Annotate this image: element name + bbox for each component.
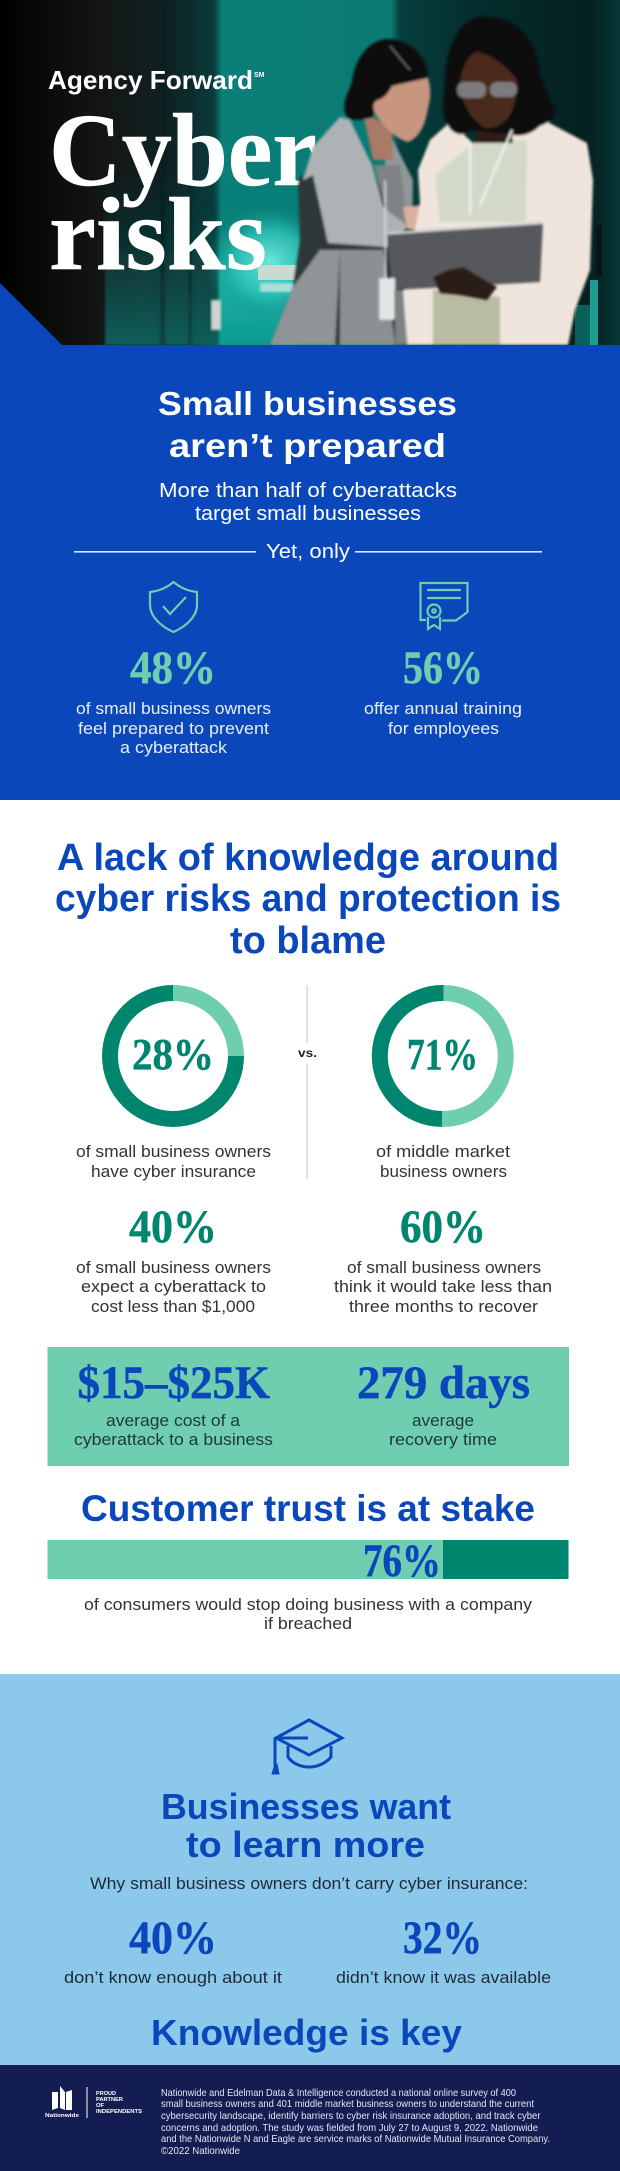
heading [158,385,457,464]
bar chart: 76% [48,1535,568,1587]
blue corner triangle [0,283,62,345]
panel: footer [0,2065,620,2171]
bar chart: 76%: 76% [363,1535,441,1587]
heading [55,837,561,962]
footnote: ©2022 Nationwide [161,2145,240,2157]
heading: to learn more [186,1824,425,1865]
heading: A lack of knowledge around [57,837,559,879]
hero title: Cyber risks: risks [49,177,267,292]
icon: shield check [150,582,197,632]
stat: 48% [76,642,271,757]
donut chart: 28% [110,993,236,1119]
hero kicker: Agency Forward: Agency Forward [48,65,253,95]
heading: Businesses want [161,1786,451,1827]
panel background blue [0,345,620,800]
caption: 28%: have cyber insurance [91,1163,256,1181]
partner tagline: OF [96,2103,105,2109]
heading: cyber risks and protection is [55,878,561,920]
caption: consumers: of consumers would stop doing business with a company [84,1596,533,1614]
panel: lack of knowledge [0,800,620,1674]
stat: 60% recovery: 60% [400,1201,486,1253]
stat: 32%: 32% [403,1912,482,1964]
stat: 40% cost: 40% [129,1201,217,1253]
hero kicker: Agency Forward: SM [254,72,265,79]
stat: 48%: feel prepared to prevent [78,720,269,738]
panel background light blue [0,1674,620,2065]
subheading: More than half of cyberattacks [159,480,457,502]
stat: 60% recovery: of small business owners [347,1259,541,1277]
caption: consumers [84,1596,533,1633]
caption: 28% [76,1143,271,1181]
photo: laptop and hands [379,180,543,320]
stat: 40% [64,1912,282,1987]
footnote: concerns and adoption. The study was fielded from July 27 to August 9, 2022. Nationwide [161,2122,538,2134]
callout band: cost and recovery: average [412,1412,474,1430]
stat: 40% cost: cost less than $1,000 [91,1298,255,1316]
partner tagline: INDEPENDENTS [96,2109,142,2115]
stat: 40% cost: expect a cyberattack to [81,1278,266,1296]
heading: Small businesses [158,385,457,422]
stat: 60% recovery: think it would take less than [334,1278,552,1296]
stat: 32%: didn’t know it was available [336,1969,551,1987]
stat: 48%: 48% [130,642,216,694]
footnote [161,2087,550,2157]
stat: 40% cost: of small business owners [76,1259,271,1277]
photo: woman in cream hoodie [403,17,593,345]
partner tagline [86,2087,142,2118]
stat: 60% recovery: three months to recover [349,1298,539,1316]
hero title: Cyber risks: Cyber [49,93,317,208]
stat: 60% recovery [334,1201,552,1316]
subheading: Why small business owners don’t carry cyber insurance: [90,1875,528,1893]
subheading: target small businesses [195,503,421,525]
subheading [159,480,457,525]
caption: 28%: of small business owners [76,1143,271,1161]
heading [161,1786,451,1865]
stat: 56% [364,642,522,738]
icon: certificate [420,583,468,629]
icon: graduation cap [272,1720,342,1774]
heading: customer trust: Customer trust is at stake [81,1488,535,1529]
footnote: small business owners and 401 middle market business owners to understand the current [161,2098,534,2110]
callout band: cost and recovery: recovery time [389,1431,497,1449]
logo: Nationwide: Nationwide [45,2113,79,2119]
stat: 56%: for employees [388,720,499,738]
stat: 40%: don’t know enough about it [64,1969,282,1987]
footer background navy [0,2065,620,2171]
panel background white [0,800,620,1674]
divider with vs.: vs. [298,1046,317,1060]
heading: aren’t prepared [169,427,446,464]
stat: 40% cost [76,1201,271,1316]
photo: woman in grey shirt [269,37,432,345]
caption: 71%: of middle market [376,1143,510,1161]
stat: 40%: 40% [129,1912,217,1964]
footnote: and the Nationwide N and Eagle are service marks of Nationwide Mutual Insurance Company. [161,2133,550,2145]
partner tagline: PARTNER [96,2097,123,2103]
logo: Nationwide [45,2086,79,2119]
panel: hero photo header [0,0,620,345]
divider: Yet, only: Yet, only [266,541,350,563]
callout band: cost and recovery: $15–$25K [78,1357,270,1409]
closing line: Knowledge is key: Knowledge is key [151,2012,462,2053]
panel: small businesses aren't prepared [0,345,620,800]
photo background: server room [0,0,620,345]
callout band: cost and recovery: cyberattack to a business [74,1431,273,1449]
stat: 48%: a cyberattack [120,739,228,757]
donut chart: 28%: 28% [132,1030,214,1079]
hero title: Cyber risks [52,112,316,270]
caption: 71% [376,1143,510,1181]
partner tagline: PROUD [96,2091,116,2097]
caption: consumers: if breached [264,1615,352,1633]
panel: businesses want to learn more [0,1674,620,2065]
donut chart: 71%: 71% [407,1030,478,1079]
callout band: cost and recovery [48,1347,569,1466]
stat: 48%: of small business owners [76,700,271,718]
footnote: cybersecurity landscape, identify barriers to cyber risk insurance adoption, and track cyber [161,2110,541,2122]
stat: 32% [336,1912,551,1987]
footnote: Nationwide and Edelman Data & Intelligence conducted a national online survey of 400 [161,2087,516,2099]
caption: 71%: business owners [380,1163,507,1181]
stat: 56%: offer annual training [364,700,522,718]
donut chart: 71% [380,993,506,1119]
callout band: cost and recovery: average cost of a [106,1412,241,1430]
heading: to blame [230,920,386,962]
callout band: cost and recovery: 279 days [357,1357,530,1409]
stat: 56%: 56% [403,642,483,694]
